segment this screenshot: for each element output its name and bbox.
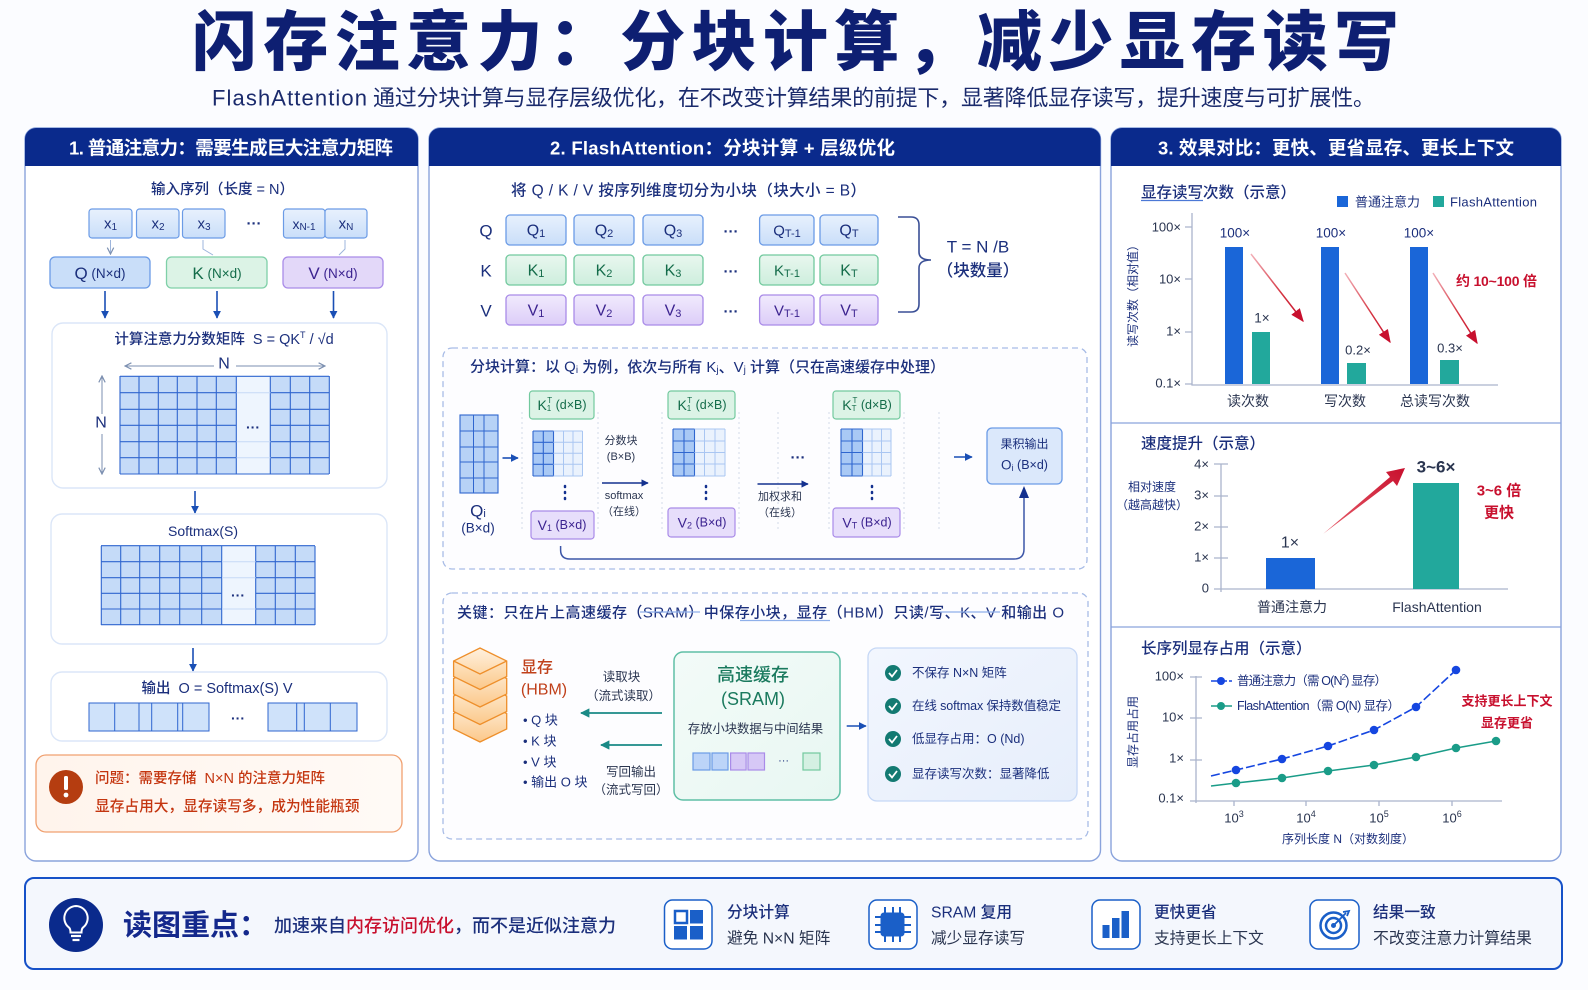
score matrix card xyxy=(52,323,387,488)
read flow label xyxy=(586,670,661,703)
block step T: T xyxy=(852,520,858,530)
dimension arrows N xyxy=(95,356,325,474)
item text xyxy=(931,904,1025,948)
ellipsis column xyxy=(724,224,738,320)
weighted sum label and arrow: 加权求和 xyxy=(758,490,802,503)
Q blocks: 2 xyxy=(607,228,613,240)
K blocks: 1 xyxy=(538,268,544,280)
chart 2 axes: 1× xyxy=(1194,550,1209,564)
chart 1 categories: 总读写次数 xyxy=(1400,393,1470,409)
chart 2 axes xyxy=(1116,456,1508,596)
benefit: no N×N xyxy=(885,665,1007,681)
cumulative output box: (B×d) xyxy=(1014,458,1048,472)
chart 3 callout: 显存更省 xyxy=(1481,716,1533,730)
input tokens: N xyxy=(346,222,353,232)
item text xyxy=(1373,904,1532,948)
chart 1 categories: 写次数 xyxy=(1324,393,1366,409)
output title: 输出 O = Softmax(S) V xyxy=(141,680,293,697)
Qi matrix: Q xyxy=(470,502,483,520)
block step 2: 2 xyxy=(687,520,692,530)
chart: memory footprint xyxy=(1125,638,1553,846)
chart 3 callout: 支持更长上下文 xyxy=(1461,694,1553,708)
Q blocks: Q xyxy=(839,222,852,240)
SRAM title: (SRAM) xyxy=(721,689,785,709)
score matrix title: / √d xyxy=(306,332,334,348)
HBM bullet list: • 输出 O 块 xyxy=(523,774,588,790)
block step 1: (B×d) xyxy=(552,518,586,532)
block step 2: (B×d) xyxy=(692,516,726,530)
SRAM mini blocks: ··· xyxy=(778,755,789,767)
chart 2 axes: 0 xyxy=(1202,580,1209,596)
chart 2 categories: FlashAttention xyxy=(1392,599,1482,615)
chart 3 axes: 10 xyxy=(1224,810,1239,826)
arrow to cumulative output xyxy=(954,456,972,458)
panel: 2 FlashAttention xyxy=(429,128,1100,861)
item text: 更快更省 xyxy=(1154,904,1217,922)
block step 2: K xyxy=(677,397,687,413)
attention matrix grid xyxy=(120,376,330,474)
panel: 1 ordinary attention xyxy=(25,128,418,861)
chart 3 axes: 3 xyxy=(1239,809,1244,819)
weighted sum label and arrow: （在线） xyxy=(758,505,802,519)
takeaway bar xyxy=(25,878,1562,969)
K blocks xyxy=(506,255,878,285)
chart 1 legend: 普通注意力 xyxy=(1355,194,1420,210)
chart 1 value labels: 100× xyxy=(1220,226,1250,240)
K blocks: T-1 xyxy=(784,268,800,280)
item: block computing xyxy=(664,900,831,949)
chart 2 value labels xyxy=(1281,458,1455,552)
block step 2: 1 xyxy=(687,404,692,412)
problem text: 问题：需要存储 N×N 的注意力矩阵 xyxy=(95,769,325,787)
chart 2 value labels: 1× xyxy=(1281,534,1299,552)
item text: 支持更长上下文 xyxy=(1154,930,1264,948)
chart 2 bars xyxy=(1266,483,1459,589)
HBM bullet list xyxy=(523,712,588,790)
connector arrows from tokens xyxy=(110,240,345,255)
dimension arrows N: N xyxy=(218,356,230,372)
arrow to softmax xyxy=(194,491,196,513)
HBM bullet list: • Q 块 xyxy=(523,712,558,728)
chart 2 categories xyxy=(1257,599,1482,615)
chart 3 axes xyxy=(1125,668,1502,846)
V blocks: V xyxy=(528,302,538,320)
chart 2 axes: 相对速度 xyxy=(1128,479,1176,494)
row labels: K xyxy=(480,262,492,280)
write flow label: 写回输出 xyxy=(606,764,656,779)
SRAM box xyxy=(674,652,840,800)
softmax step label and arrow: softmax xyxy=(605,490,644,502)
softmax step label and arrow: 分数块 xyxy=(604,434,638,447)
score matrix title: T xyxy=(300,330,306,340)
V blocks: 3 xyxy=(675,308,681,320)
chart 2 callout: 更快 xyxy=(1484,504,1514,522)
read flow label: 读取块 xyxy=(603,670,641,684)
arrow to output xyxy=(192,648,194,671)
split label: 将 Q / K / V 按序列维度切分为小块（块大小 = B） xyxy=(511,180,866,200)
panel 2 header xyxy=(429,128,1100,166)
T = N/B label xyxy=(937,238,1019,280)
block computation heading: j xyxy=(715,364,719,376)
block step 1: 1 xyxy=(547,523,552,533)
block step 2 xyxy=(668,391,735,537)
V blocks: V xyxy=(596,302,606,320)
panel 2 header: 2. FlashAttention：分块计算 + 层级优化 xyxy=(550,138,895,158)
input sequence label: 输入序列（长度 = N） xyxy=(151,181,294,198)
dotted separators xyxy=(522,412,939,530)
item text: 减少显存读写 xyxy=(931,930,1025,948)
V blocks: V xyxy=(665,302,675,320)
chart 2 categories: 普通注意力 xyxy=(1257,599,1327,615)
block step 2: T xyxy=(687,396,692,404)
chart 1 axes: 1× xyxy=(1166,324,1181,338)
benefit: no N×N: 不保存 N×N 矩阵 xyxy=(912,666,1007,680)
K box xyxy=(166,257,267,288)
weighted sum label and arrow: ··· xyxy=(790,450,806,466)
subtitle: 通过分块计算与显存层级优化，在不改变计算结果的前提下，显著降低显存读写，提升速度与可扩展性。 xyxy=(373,86,1375,110)
chart 1 callout: 约 10~100 倍 xyxy=(1456,273,1537,289)
chart 3 axes: 10× xyxy=(1162,710,1184,724)
subtitle: FlashAttention xyxy=(212,86,367,110)
arrow Qi to blocks xyxy=(502,457,518,459)
softmax matrix grid: ··· xyxy=(231,587,245,603)
write flow label: （流式写回） xyxy=(593,783,669,797)
item text xyxy=(727,902,831,948)
Q box xyxy=(50,257,150,288)
V blocks xyxy=(506,295,878,325)
HBM bullet list: • K 块 xyxy=(523,734,556,748)
cumulative output box: O xyxy=(1001,458,1012,472)
chart 2 axes: 4× xyxy=(1194,456,1209,472)
takeaway heading: 读图重点： xyxy=(123,909,268,942)
Q blocks: Q xyxy=(664,222,676,240)
row labels xyxy=(479,222,493,320)
benefits panel xyxy=(868,648,1077,801)
SRAM title: 高速缓存 xyxy=(717,665,789,685)
chart 3 axes: 序列长度 N（对数刻度） xyxy=(1282,831,1414,846)
Qi matrix: (B×d) xyxy=(461,520,495,536)
softmax title: Softmax(S) xyxy=(168,523,238,539)
HBM label: 显存 xyxy=(521,658,553,676)
chart 3 axes: 4 xyxy=(1311,809,1316,819)
HBM label: (HBM) xyxy=(521,682,567,698)
write flow label xyxy=(593,764,669,797)
cumulative output box: 果积输出 xyxy=(1000,436,1049,451)
problem text xyxy=(95,769,360,815)
icon: grid xyxy=(664,900,712,949)
chart 1 legend: FlashAttention xyxy=(1450,194,1537,210)
chart 2 axes: （越高越快） xyxy=(1116,497,1188,512)
chart 3 axes: 显存占用占用 xyxy=(1125,696,1140,768)
block step 1: T xyxy=(547,396,552,404)
benefit: low memory: 低显存占用：O (Nd) xyxy=(912,731,1025,746)
chart 3 axes: 5 xyxy=(1384,809,1389,819)
block step 1: (d×B) xyxy=(552,398,587,412)
Q blocks: Q xyxy=(527,222,539,240)
cumulative output box xyxy=(987,428,1062,484)
Q blocks: T-1 xyxy=(785,228,801,240)
chart 1 title: 显存读写次数（示意） xyxy=(1141,182,1296,202)
Qi matrix xyxy=(460,415,498,536)
HBM bullet list: • V 块 xyxy=(523,754,556,770)
V blocks: T xyxy=(851,308,858,320)
chart 3 legend: 普通注意力（需 O(N xyxy=(1237,674,1342,688)
chart 3 legend: FlashAttention（需 O(N) 显存） xyxy=(1237,699,1400,713)
K blocks: 3 xyxy=(675,268,681,280)
chart 3 axes: 10 xyxy=(1369,810,1384,826)
HBM label xyxy=(521,658,567,698)
block step T: V xyxy=(842,514,852,530)
V blocks: V xyxy=(774,302,784,320)
chart 1 value labels: 100× xyxy=(1316,226,1346,240)
block step 1: V xyxy=(538,517,548,533)
output blocks xyxy=(89,703,357,731)
dashed panel: block computation xyxy=(443,348,1087,569)
chart 3 axes: 0.1× xyxy=(1158,790,1184,806)
K blocks: K xyxy=(665,262,675,280)
panel 1 header xyxy=(25,128,418,166)
K blocks: K xyxy=(774,262,784,280)
item text: 避免 N×N 矩阵 xyxy=(727,930,831,948)
chart 1 categories: 读次数 xyxy=(1227,393,1269,409)
Q blocks: Q xyxy=(773,222,785,240)
T = N/B label: T = N /B xyxy=(947,238,1009,256)
block step 1: 1 xyxy=(547,404,552,412)
input tokens: 1 xyxy=(111,222,117,232)
chart: speedup xyxy=(1116,434,1521,615)
item text: 分块计算 xyxy=(727,902,790,922)
chart 1 value labels: 1× xyxy=(1254,310,1270,326)
row labels: Q xyxy=(479,222,493,240)
V blocks: V xyxy=(840,302,851,320)
block step 2: V xyxy=(678,514,688,530)
benefit: fewer reads and writes: 显存读写次数：显著降低 xyxy=(912,766,1050,781)
icon: HBM stack xyxy=(454,648,507,742)
ellipsis column: ··· xyxy=(724,304,738,320)
series: ordinary attention xyxy=(1211,666,1460,776)
takeaway sentence: 加速来自内存访问优化，而不是近似注意力 xyxy=(274,916,616,936)
chart 1 value labels: 0.3× xyxy=(1437,340,1463,356)
SRAM mini blocks xyxy=(693,753,820,770)
output blocks: ··· xyxy=(231,710,245,726)
Q blocks: 3 xyxy=(676,228,682,240)
chart 3 axes: 1× xyxy=(1169,750,1184,766)
V blocks: 2 xyxy=(606,308,612,320)
item: SRAM reuse xyxy=(869,900,1025,949)
chart 3 title: 长序列显存占用（示意） xyxy=(1141,638,1312,658)
dashed panel: key idea xyxy=(443,593,1088,839)
input tokens: x xyxy=(151,216,159,232)
icon: warning xyxy=(49,770,83,804)
chart 1 axes: 读写次数（相对值） xyxy=(1125,239,1140,347)
block computation heading xyxy=(470,358,945,376)
panel 3 header: 3. 效果对比：更快、更省显存、更长上下文 xyxy=(1158,138,1514,158)
block computation heading: j xyxy=(743,364,746,376)
softmax step label and arrow: (B×B) xyxy=(607,451,635,463)
chart 3 axes: 10 xyxy=(1296,810,1311,826)
chart 3 axes: 6 xyxy=(1457,809,1462,819)
benefit: online softmax: 在线 softmax 保持数值稳定 xyxy=(912,698,1061,713)
block step 2: (d×B) xyxy=(692,398,727,412)
Qi matrix: i xyxy=(483,508,486,520)
input tokens: ··· xyxy=(246,216,262,232)
brace xyxy=(898,217,931,312)
arrows to score matrix xyxy=(105,291,334,318)
item text xyxy=(1154,904,1264,948)
Q blocks: T xyxy=(852,228,859,240)
chart 2 axes: 2× xyxy=(1194,518,1209,534)
input tokens xyxy=(89,209,367,238)
item text: 结果一致 xyxy=(1373,904,1436,922)
chart 1 value labels: 100× xyxy=(1404,226,1434,240)
feedback arrow xyxy=(561,486,1029,559)
icon: light bulb xyxy=(49,898,103,952)
softmax card xyxy=(51,514,387,644)
K box: K (N×d) xyxy=(192,264,242,282)
block step T: T xyxy=(852,396,857,404)
chart 1 value labels xyxy=(1220,226,1463,358)
input tokens: x xyxy=(197,216,205,232)
icon: target xyxy=(1310,900,1359,949)
block computation heading: 为例，依次与所有 K xyxy=(578,358,716,376)
Q box: Q (N×d) xyxy=(74,264,126,282)
block step T xyxy=(833,391,900,537)
chart 2 title: 速度提升（示意） xyxy=(1141,434,1265,452)
softmax matrix grid xyxy=(101,546,315,625)
input tokens: x xyxy=(292,216,299,232)
block computation heading: 分块计算：以 Q xyxy=(470,358,576,376)
dividers xyxy=(1111,423,1561,627)
panel 1 header: 1. 普通注意力：需要生成巨大注意力矩阵 xyxy=(69,138,393,158)
item text: SRAM 复用 xyxy=(931,904,1012,922)
icon: chip xyxy=(869,900,917,949)
block step T: T xyxy=(852,404,857,412)
chart 1 bars xyxy=(1225,247,1459,384)
K blocks: K xyxy=(528,262,538,280)
item text: 不改变注意力计算结果 xyxy=(1373,928,1532,948)
chart 1 categories xyxy=(1227,393,1470,409)
key idea heading: 关键：只在片上高速缓存（SRAM）中保存小块，显存（HBM）只读/写、K、V 和输出 O xyxy=(457,604,1064,622)
K blocks: K xyxy=(840,262,851,280)
attention matrix grid: ··· xyxy=(246,419,260,435)
input tokens: N-1 xyxy=(299,222,316,232)
arrow to benefits xyxy=(847,725,866,727)
series: FlashAttention xyxy=(1211,737,1500,787)
chart 2 axes: 3× xyxy=(1194,488,1209,502)
chart 3 callout xyxy=(1461,694,1553,730)
T = N/B label: （块数量） xyxy=(937,261,1019,280)
read and write arrows xyxy=(581,713,662,745)
chart 3 axes: 10 xyxy=(1442,810,1457,826)
problem callout xyxy=(36,755,402,832)
chart 2 callout xyxy=(1477,482,1521,522)
ellipsis column: ··· xyxy=(724,224,738,240)
chart 3 legend: 2 xyxy=(1342,672,1347,682)
problem text: 显存占用大，显存读写多，成为性能瓶颈 xyxy=(95,798,360,815)
block step T: (d×B) xyxy=(857,398,892,412)
softmax step label and arrow xyxy=(602,434,648,518)
V blocks: 1 xyxy=(538,308,544,320)
softmax step label and arrow: （在线） xyxy=(602,504,646,518)
block step T: K xyxy=(842,397,852,413)
panel 3 header xyxy=(1111,128,1561,166)
chart 1 axes xyxy=(1125,213,1498,390)
SRAM title xyxy=(717,665,789,709)
block computation heading: 计算（只在高速缓存中处理） xyxy=(746,358,945,376)
input tokens: 3 xyxy=(205,222,211,232)
score matrix title: 计算注意力分数矩阵 S = QK xyxy=(114,332,300,348)
block step T: (B×d) xyxy=(857,516,892,530)
chart 3 legend xyxy=(1211,672,1400,713)
block step 1 xyxy=(530,391,594,539)
chart 2 value labels: 3~6× xyxy=(1417,458,1455,476)
main title: 闪存注意力：分块计算，减少显存读写 xyxy=(192,6,1399,78)
block computation heading: 、V xyxy=(719,358,744,376)
panel: 3 results comparison xyxy=(1111,128,1561,861)
K blocks: T xyxy=(851,268,858,280)
chart 1 reduction arrows xyxy=(1251,254,1477,343)
V box xyxy=(283,257,383,288)
input tokens: 2 xyxy=(159,222,165,232)
input tokens: x xyxy=(104,216,111,232)
Q blocks: 1 xyxy=(539,228,545,240)
Q blocks xyxy=(506,215,878,245)
SRAM description: 存放小块数据与中间结果 xyxy=(688,721,823,736)
K blocks: 2 xyxy=(606,268,612,280)
row labels: V xyxy=(480,302,492,320)
read flow label: （流式读取） xyxy=(586,689,661,703)
chart 2 rising arrow xyxy=(1323,468,1405,534)
chart 3 axes: 100× xyxy=(1155,668,1184,684)
ellipsis column: ··· xyxy=(724,264,738,280)
chart 1 axes: 0.1× xyxy=(1155,376,1181,390)
chart 2 callout: 3~6 倍 xyxy=(1477,482,1521,500)
item: faster and smaller xyxy=(1092,900,1264,949)
item: same result xyxy=(1310,900,1532,949)
cumulative output box: i xyxy=(1012,463,1014,473)
input tokens: x xyxy=(339,216,346,232)
chart 1 axes: 100× xyxy=(1152,220,1181,234)
V box: V (N×d) xyxy=(308,264,358,282)
K blocks: K xyxy=(596,262,606,280)
output card xyxy=(51,672,387,741)
chart: memory reads and writes xyxy=(1125,182,1537,409)
block step 1: K xyxy=(537,397,547,413)
chart 1 value labels: 0.2× xyxy=(1345,342,1371,358)
Q blocks: Q xyxy=(595,222,607,240)
chart 1 legend xyxy=(1337,194,1537,210)
dimension arrows N: N xyxy=(95,414,107,432)
chart 1 axes: 10× xyxy=(1159,272,1181,286)
V blocks: T-1 xyxy=(784,308,800,320)
weighted sum label and arrow xyxy=(758,450,808,519)
icon: bars xyxy=(1092,900,1140,949)
block computation heading: i xyxy=(576,364,578,376)
chart 3 legend: ) 显存） xyxy=(1345,674,1387,688)
